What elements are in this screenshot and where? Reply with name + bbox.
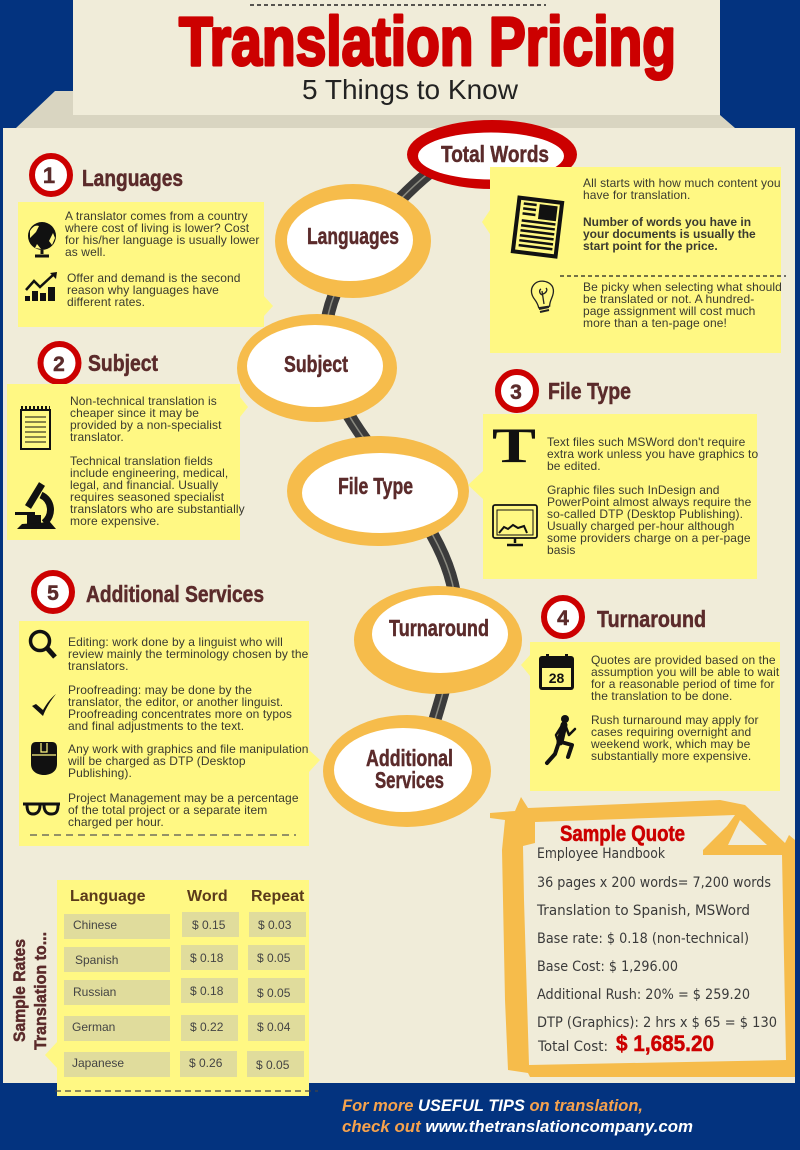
quote lines: Base Cost: $ 1,296.00 [537,959,678,975]
text: total words: page assignment will cost much [583,304,755,318]
text: additional services: Proofreading concentrates more on typos [68,707,292,721]
icon: mouse [31,742,57,775]
sample rates vertical label [10,932,50,1050]
quote lines: Base rate: $ 0.18 (non-technical) [537,931,749,947]
text: subject: Technical translation fields [70,454,213,468]
panel: rates table [45,880,318,1096]
text: subject: requires seasoned specialist [70,490,225,504]
text: file type: Text files such MSWord don't require [547,435,746,449]
table headers [70,888,305,905]
text: additional services: review mainly the terminology chosen by the [68,647,309,661]
text: subject: legal, and financial. Usually [70,478,218,492]
text: total words: Number of words you have in [583,215,751,229]
text: additional services: translators. [68,659,129,673]
node: Additional Services [323,715,491,827]
node: Turnaround [354,586,522,694]
panel: subject [7,384,248,540]
text: subject: translators who are substantially [70,502,245,516]
icon: glasses [23,804,60,814]
text: total words: start point for the price. [583,239,718,253]
icon: magnifier [30,632,55,657]
heading: 4 Turnaround: 4 [557,607,569,630]
text: turnaround: substantially more expensive. [591,749,751,763]
text: turnaround: cases requiring overnight and [591,725,751,739]
text: turnaround [590,653,780,763]
quote lines: 36 pages x 200 words= 7,200 words [537,875,771,891]
text: languages: different rates. [67,295,145,309]
text: additional services: Proofreading: may be done by the [68,683,252,697]
heading: 5 Additional Services: 5 [47,582,59,605]
table text: $ 0.05 [256,1058,290,1072]
table headers: Language [70,888,146,905]
node: Total Words [407,120,577,189]
table text [72,918,292,1072]
quote lines: DTP (Graphics): 2 hrs x $ 65 = $ 130 [537,1015,777,1031]
panel: languages [18,202,273,327]
heading: 3 File Type: File Type [548,378,631,404]
table text: $ 0.18 [190,951,224,965]
table text: $ 0.26 [189,1056,223,1070]
text: file type: extra work unless you have graphics to [547,447,758,461]
box shadow top [16,91,735,128]
heading: 2 Subject [40,344,158,382]
icon: letter T: T [492,417,536,473]
table text: German [72,1020,115,1034]
text: subject: Non-technical translation is [70,394,217,408]
subtitle: 5 Things to Know [302,74,519,105]
table text: $ 0.15 [192,918,226,932]
text: turnaround: Quotes are provided based on the [591,653,776,667]
text: additional services: and final adjustments to the text. [68,719,244,733]
text: additional services: Any work with graphics and file manipulation [68,742,309,756]
quote lines: Translation to Spanish, MSWord [536,903,750,919]
heading: 1 Languages: 1 [43,163,55,188]
table headers: Repeat [251,888,305,905]
text: turnaround: the translation to be done. [591,689,732,703]
text: file type: be edited. [547,459,601,473]
table text: $ 0.05 [257,951,291,965]
heading: 2 Subject: Subject [88,350,158,376]
icon: microscope [15,484,56,529]
icon: monitor [493,505,537,545]
text: file type: some providers charge on a per-page [547,531,751,545]
table text: Chinese [73,918,117,932]
title: Translation Pricing [179,3,676,80]
node: Languages [275,184,431,298]
table text: Japanese [72,1056,124,1070]
node: Additional Services: Additional [366,745,453,771]
text: total words: more than a ten-page one! [583,316,727,330]
footer call to action [342,1096,693,1136]
node: Total Words: Total Words [441,141,549,167]
icon: newspaper [511,195,564,259]
icon: calendar [539,654,574,690]
text: total words [583,176,782,330]
heading: 3 File Type [498,372,631,410]
icon: globe [28,222,56,256]
icon: runner [547,715,575,763]
table headers: Word [187,888,228,905]
node: Subject: Subject [284,351,348,377]
text: additional services: charged per hour. [68,815,164,829]
quote heading: Sample Quote [560,821,685,846]
quote lines [536,846,777,1055]
table cells [64,912,306,1077]
text: additional services: translator, the editor, or another linguist. [68,695,283,709]
text: subject: more expensive. [70,514,160,528]
text: subject: cheaper since it may be [70,406,199,420]
text: languages: reason why languages have [67,283,219,297]
table text: $ 0.18 [190,984,224,998]
table text: $ 0.03 [258,918,292,932]
text: subject [70,394,245,528]
table text: $ 0.05 [257,986,291,1000]
heading: 3 File Type: 3 [510,381,522,404]
panel: file type [468,414,758,579]
footer call to action: For more USEFUL TIPS on translation, [342,1096,643,1115]
text: total words: be translated or not. A hundred- [583,292,754,306]
text: additional services: Editing: work done by a linguist who will [68,635,283,649]
text: languages: A translator comes from a country [65,209,248,223]
text: total words: Be picky when selecting what should [583,280,782,294]
node: Turnaround: Turnaround [389,615,489,641]
text: languages: for his/her language is usually lower [65,233,259,247]
heading: 1 Languages: Languages [82,165,183,191]
text: total words: All starts with how much content you [583,176,781,190]
icon: check mark [32,694,56,716]
quote lines: Additional Rush: 20% = $ 259.20 [537,987,750,1003]
node: File Type: File Type [338,473,413,499]
total cost: $ 1,685.20 [616,1031,714,1056]
text: languages: as well. [65,245,106,259]
node: Languages: Languages [307,223,399,249]
heading: 4 Turnaround: Turnaround [597,606,706,632]
node: Subject [237,314,397,422]
text: additional services: will be charged as DTP (Desktop [67,754,246,768]
connecting road path [326,172,456,730]
text: additional services: Publishing). [68,766,132,780]
heading: 5 Additional Services: Additional Services [86,581,264,607]
text: file type: Usually charged per-hour although [547,519,734,533]
text: turnaround: Rush turnaround may apply for [591,713,759,727]
icon: calendar: 28 [549,670,564,686]
text: subject: provided by a non-specialist [70,418,222,432]
text: file type: Graphic files such InDesign and [547,483,720,497]
text: additional services: of the total project or a separate item [68,803,267,817]
text: languages: Offer and demand is the second [67,271,241,285]
text: turnaround: assumption you will be able to wait [591,665,780,679]
text: subject: translator. [70,430,124,444]
panel: sample quote [490,797,795,1077]
text: total words: have for translation. [583,188,690,202]
node: Additional Services: Services [375,767,444,793]
quote lines: Employee Handbook [537,846,666,862]
heading: 5 Additional Services [34,573,264,611]
text: file type: basis [547,543,576,557]
icon: light bulb [530,280,556,312]
footer call to action: check out www.thetranslationcompany.com [342,1117,693,1136]
heading: 1 Languages [32,156,183,194]
text: additional services [67,635,309,829]
text: subject: include engineering, medical, [70,466,228,480]
text: turnaround: for a reasonable period of time for [591,677,775,691]
panel: total words [482,167,786,353]
table text: Spanish [75,953,118,967]
table text: $ 0.22 [190,1020,224,1034]
heading: 4 Turnaround [544,598,706,636]
sample rates vertical label: Translation to... [31,932,50,1050]
panel: turnaround [521,642,780,791]
table text: Russian [73,985,116,999]
text: total words: your documents is usually the [583,227,756,241]
heading: 2 Subject: 2 [53,353,65,376]
icon: notepad [21,408,50,449]
text: file type: PowerPoint almost always require the [547,495,752,509]
panel: additional services [19,621,320,846]
text: turnaround: weekend work, which may be [590,737,751,751]
text: file type [547,435,758,557]
sample rates vertical label: Sample Rates [10,939,29,1042]
text: file type: so-called DTP (Desktop Publishing). [547,507,743,521]
icon: growth chart [25,272,57,301]
text: additional services: Project Management may be a percentage [68,791,299,805]
text: languages [64,209,259,309]
table text: $ 0.04 [257,1020,291,1034]
text: languages: where cost of living is lower? Cost [64,221,250,235]
node: File Type [287,436,469,546]
title banner [73,0,720,115]
brush frame [490,797,795,1077]
quote lines: Total Cost: [537,1039,608,1055]
